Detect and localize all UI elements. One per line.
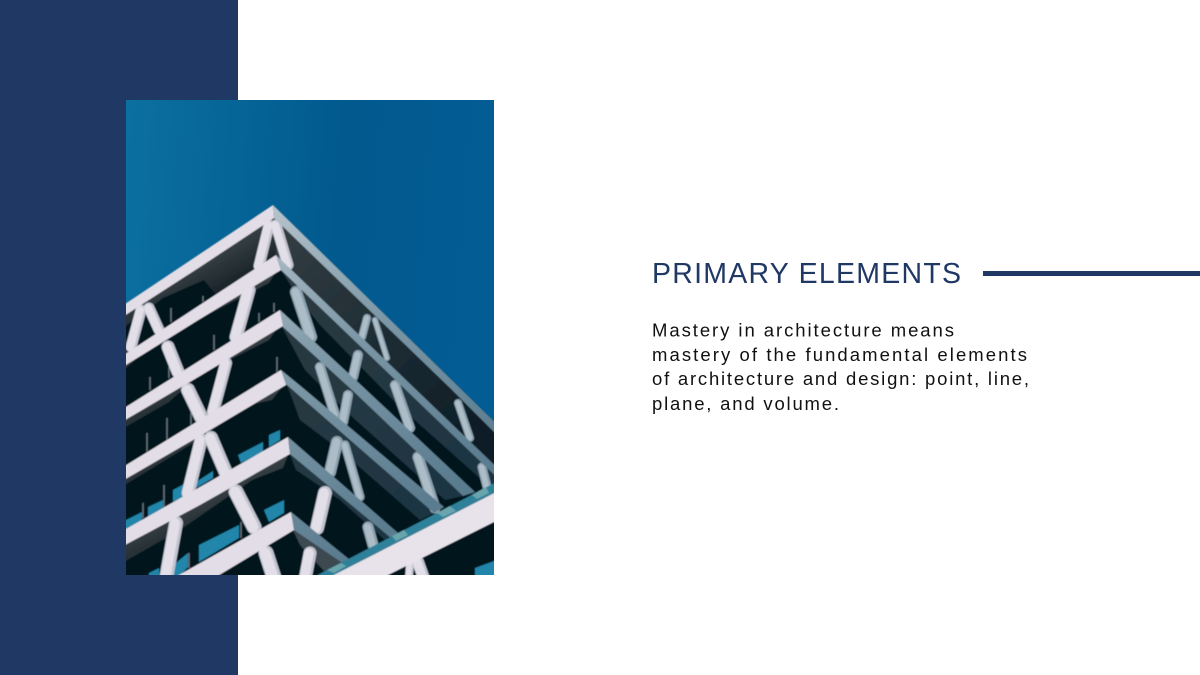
columns: lavender, front face bbox=[130, 225, 428, 590]
photo: modernist building against blue sky bbox=[126, 100, 494, 575]
slab undersides bbox=[110, 215, 510, 572]
terrace glass balustrade bbox=[306, 475, 510, 581]
terrace slab bbox=[322, 485, 510, 581]
window mullions bbox=[143, 296, 277, 568]
heading rule bbox=[983, 270, 1200, 276]
body text: Mastery in architecture means bbox=[652, 320, 954, 340]
body text bbox=[652, 320, 1029, 414]
building mass bbox=[110, 205, 510, 590]
windows bbox=[120, 430, 510, 590]
floor slabs: front faces bbox=[110, 205, 294, 580]
body text: plane, and volume. bbox=[652, 393, 839, 414]
heading: PRIMARY ELEMENTS bbox=[652, 258, 961, 290]
floor slabs: receding faces bbox=[273, 205, 510, 564]
body text: of architecture and design: point, line, bbox=[652, 368, 1029, 389]
body text: mastery of the fundamental elements bbox=[652, 344, 1027, 365]
columns: blue-gray, receding side bbox=[295, 292, 487, 545]
panel: navy side band bbox=[0, 0, 238, 675]
sky bbox=[126, 100, 494, 575]
building bbox=[110, 205, 510, 590]
